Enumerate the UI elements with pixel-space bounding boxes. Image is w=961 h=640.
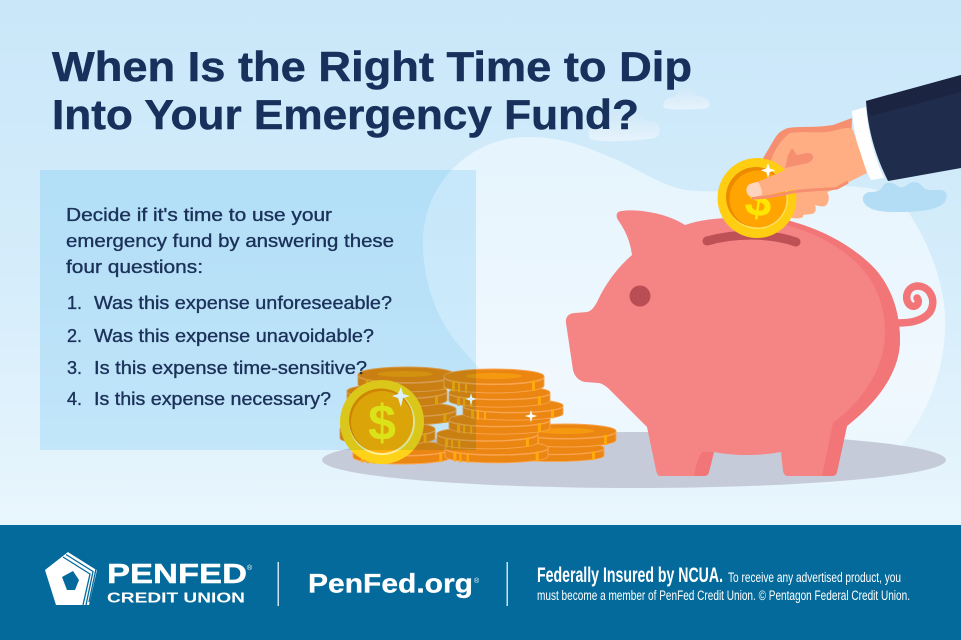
knuckle crease xyxy=(785,148,813,168)
shirt cuff xyxy=(852,107,884,180)
pig tail xyxy=(897,286,933,323)
pig eye xyxy=(630,286,650,306)
sparkles xyxy=(392,387,537,422)
ground shadow xyxy=(322,432,946,488)
cloud: upper xyxy=(663,87,710,110)
logo mark xyxy=(45,552,97,605)
centre stack xyxy=(437,369,563,463)
hand holding coin xyxy=(762,75,961,218)
fingertip nail xyxy=(746,182,762,197)
website: ® xyxy=(474,577,480,585)
intro text: Decide if it's time to use your xyxy=(66,205,332,225)
disclaimer: To receive any advertised product, you xyxy=(728,570,901,585)
logo wordmark: PENFED xyxy=(107,558,247,589)
question list: 3. xyxy=(67,358,82,378)
divider one xyxy=(278,562,279,606)
left stack xyxy=(340,367,456,464)
logo wordmark xyxy=(107,558,253,606)
suit sleeve xyxy=(866,75,961,181)
question list: Is this expense time-sensitive? xyxy=(94,358,367,378)
hand and lower fingers xyxy=(770,128,867,218)
icon: front gold coin: $ xyxy=(368,395,396,451)
question list: 1. xyxy=(67,293,82,313)
question list: Is this expense necessary? xyxy=(94,389,331,409)
coin slot xyxy=(707,235,796,242)
logo wordmark: ® xyxy=(247,564,253,572)
coin stacks xyxy=(340,367,616,464)
sparkle xyxy=(761,163,775,178)
right low stack xyxy=(504,424,616,462)
title: Into Your Emergency Fund? xyxy=(52,91,639,138)
title: When Is the Right Time to Dip xyxy=(52,43,692,90)
divider two xyxy=(506,562,508,606)
footer band xyxy=(0,525,961,640)
title xyxy=(52,43,692,138)
logo wordmark: CREDIT UNION xyxy=(107,590,245,606)
website: PenFed.org xyxy=(308,568,473,598)
question list xyxy=(67,293,392,409)
intro text xyxy=(66,205,394,277)
background light blob xyxy=(423,137,945,484)
question list: Was this expense unforeseeable? xyxy=(94,293,392,313)
question list: 4. xyxy=(67,389,82,409)
panel: questions box xyxy=(40,170,476,450)
intro text: four questions: xyxy=(66,257,203,277)
question list: Was this expense unavoidable? xyxy=(94,326,374,346)
index finger xyxy=(746,148,848,198)
pig body xyxy=(566,210,900,476)
disclaimer xyxy=(537,564,910,603)
piggy bank xyxy=(566,210,900,476)
sleeve shade xyxy=(866,75,961,116)
cloud: right xyxy=(863,182,947,212)
front leg shading xyxy=(694,452,714,476)
icon: coin entering slot xyxy=(718,158,796,238)
disclaimer: Federally Insured by NCUA. xyxy=(537,564,723,587)
icon: coin entering slot: $ xyxy=(742,172,776,229)
back of hand outline xyxy=(762,118,852,180)
cloud: lower xyxy=(588,112,660,141)
pig back shading xyxy=(783,219,900,476)
intro text: emergency fund by answering these xyxy=(66,231,394,251)
question list: 2. xyxy=(67,326,82,346)
icon: front gold coin xyxy=(340,380,424,464)
